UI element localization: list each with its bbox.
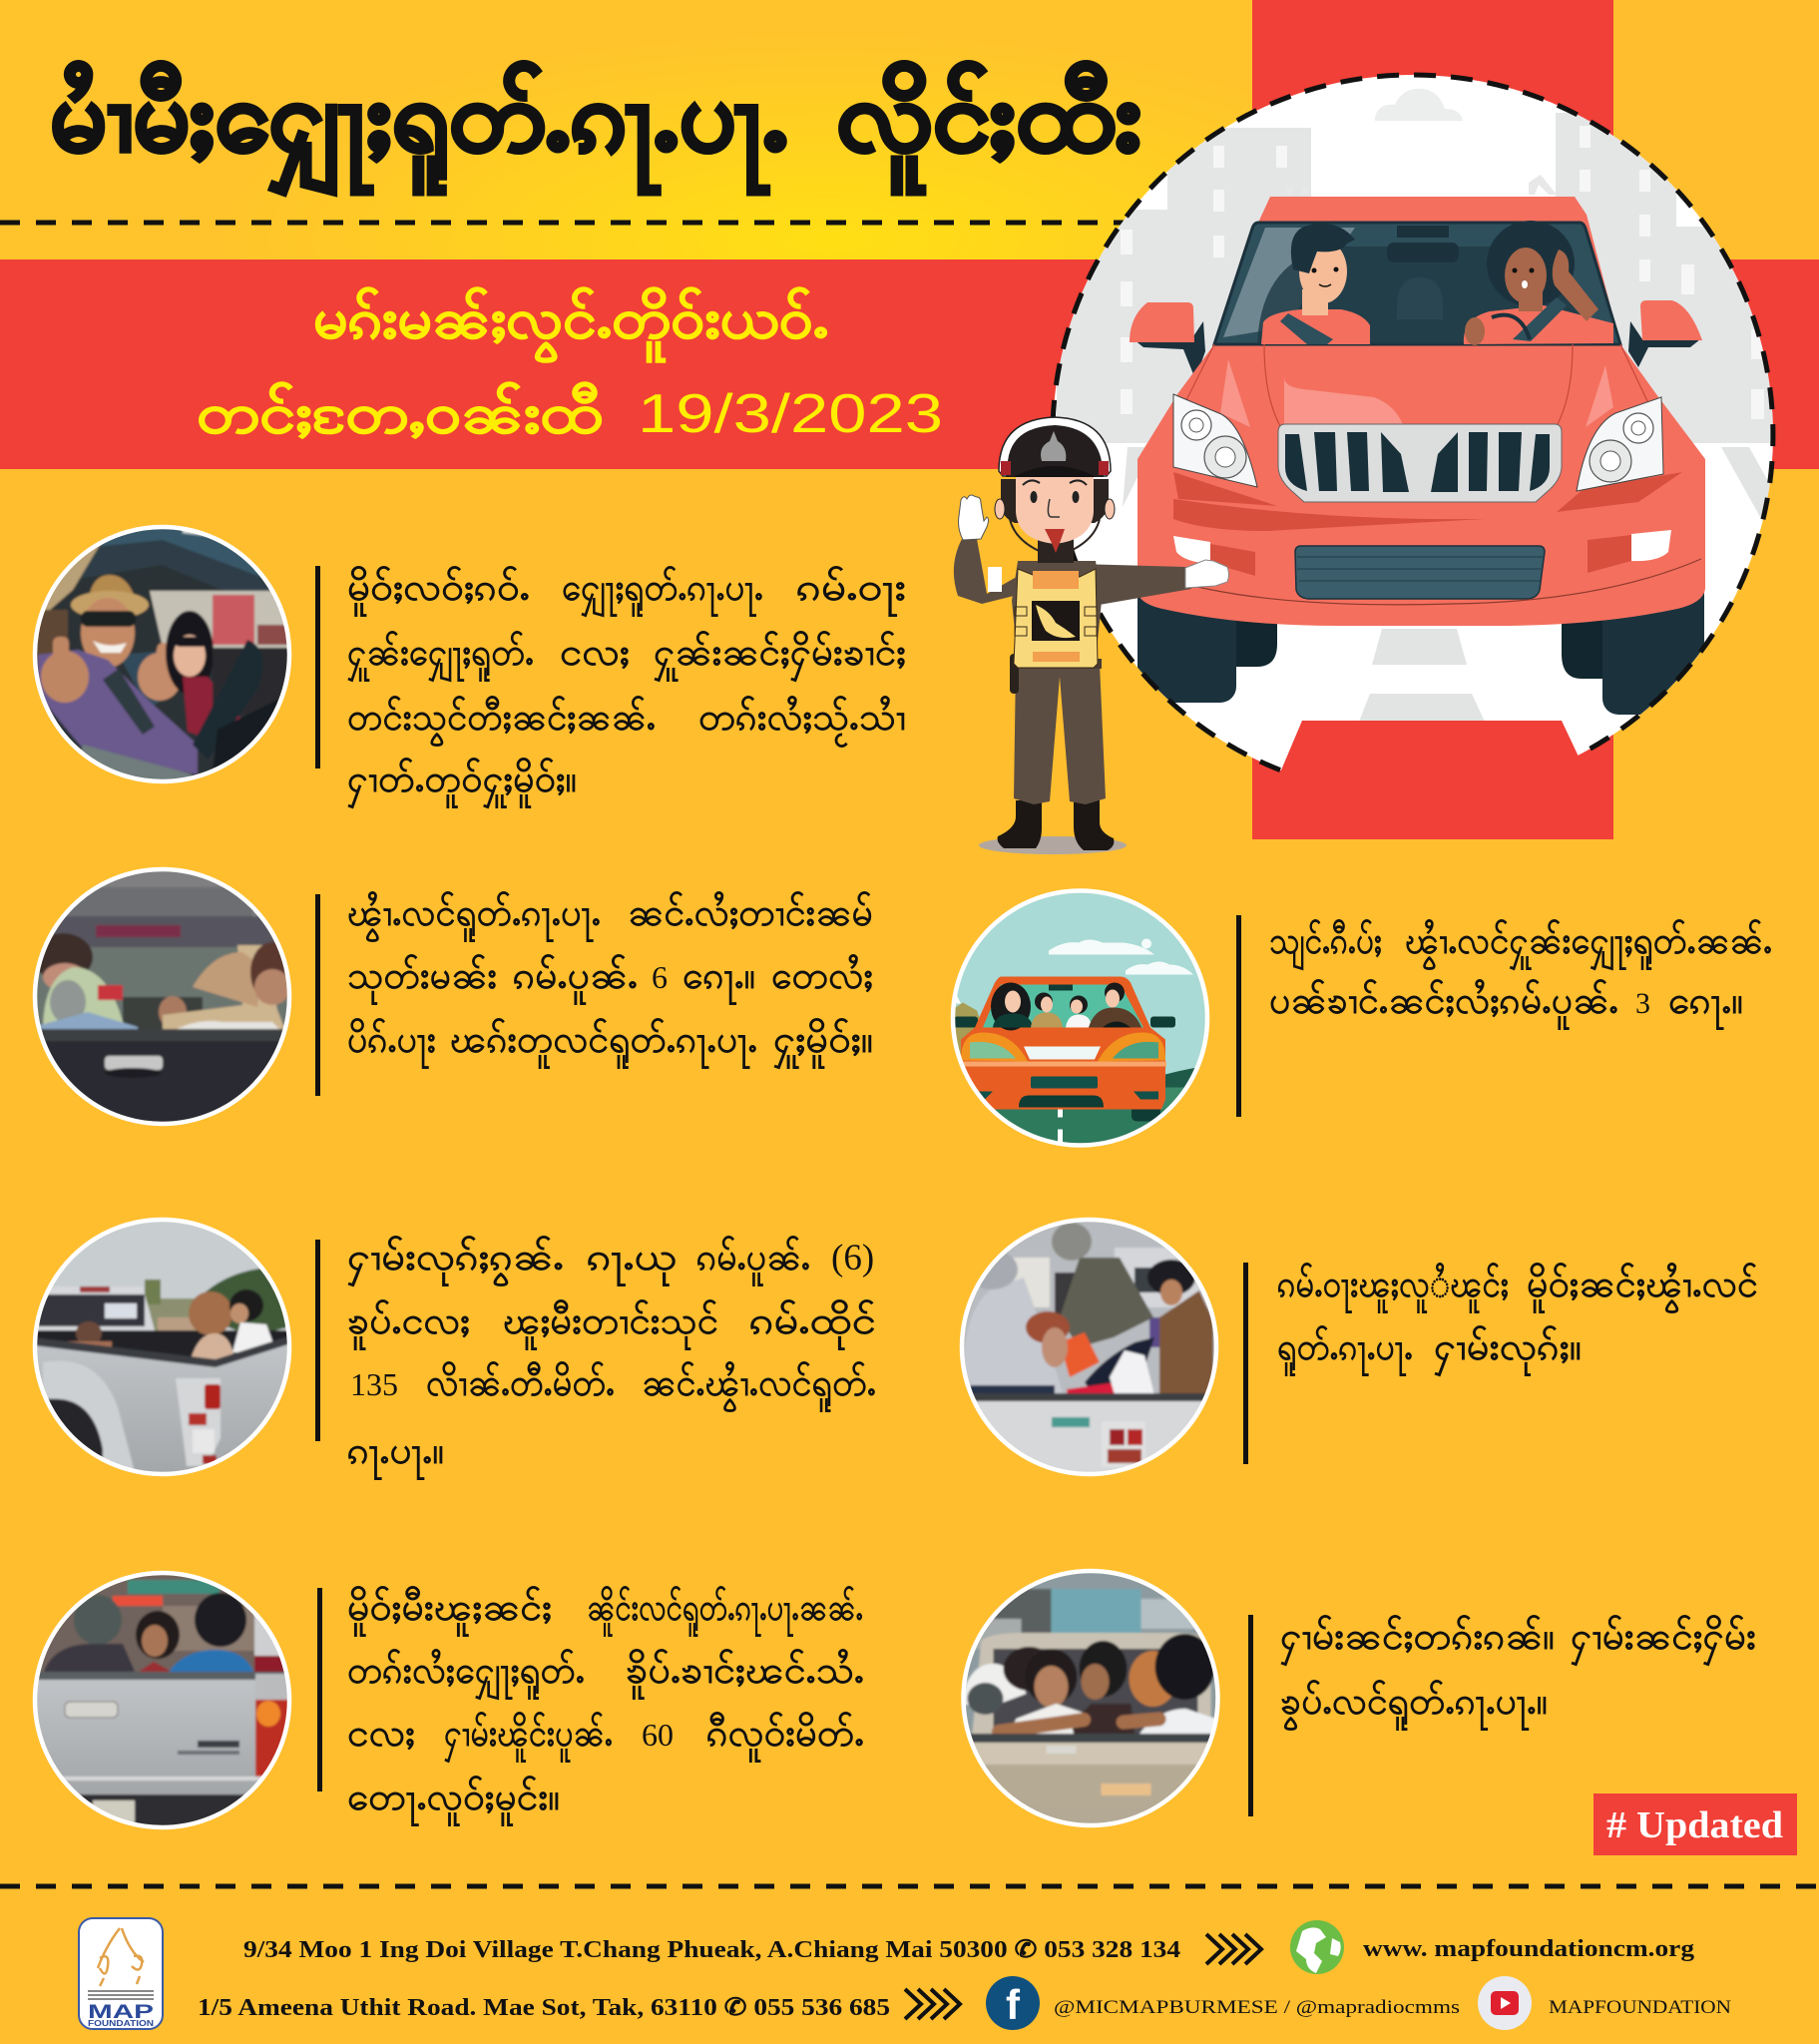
text block 4: ႁၢမ်းၽိူင်းပူၼ်ႉ (444, 1712, 613, 1764)
text block 1: တင်းသွင်တီႈၼင်ႈၼၼ်ႉ (347, 696, 656, 747)
text block right 1: 3 (1635, 987, 1650, 1020)
photo: climbing into pickup (960, 1218, 1218, 1476)
rear seat, mirror (1257, 247, 1591, 344)
logo: MAP Foundation (79, 1918, 163, 2029)
text block 1 (315, 566, 906, 809)
neck and head (1038, 539, 1074, 563)
text block 1: ႁျေႃႈရူတ်ႉၵႃႉပႃႉ (562, 566, 763, 618)
text block right 2: ႁၢမ်းလုၵ်ႈ။ (1434, 1325, 1582, 1377)
roof rails (1529, 175, 1556, 195)
text block 2: သုတ်းမၼ်း (347, 954, 497, 1005)
text block 3: ၵမ်ႉပူၼ်ႉ (696, 1236, 810, 1286)
logo: MAP Foundation: MAP (88, 2002, 154, 2023)
subtitle: တင်ႈတႄႇဝၼ်းထီ (197, 381, 603, 444)
text block 2: ၵမ်ႉပူၼ်ႉ (513, 954, 638, 1005)
subtitle: 19/3/2023 (638, 382, 943, 444)
photo: silver pickup with passengers (33, 1218, 291, 1476)
title: မၢႆမီႈႁျေႃႈရူတ်ႉၵႃႉပႃႉ (50, 61, 788, 196)
youtube handle: MAPFOUNDATION (1549, 1997, 1731, 2018)
illustration: family in orange car (951, 888, 1209, 1148)
text block 3: ၼင်ႉၽွၢႆႉလင်ရူတ်ႉ (642, 1361, 876, 1412)
text block right 2: ၵမ်ႉဝႃးၽူႈလူႆၽူင်ႈ (1277, 1263, 1509, 1313)
text block right 2: ရူတ်ႉၵႃႉပႃႉ (1277, 1325, 1413, 1376)
address line 1: 9/34 Moo 1 Ing Doi Village T.Chang Phueak, A.Chiang Mai 50300 ✆ 053 328 134 (243, 1937, 1180, 1963)
icon: globe (1290, 1920, 1344, 1974)
grille (1278, 424, 1562, 502)
updated badge: # Updated (1606, 1804, 1783, 1846)
text block right 1: ၵေႃႉ။ (1668, 980, 1743, 1030)
text block 2: ပိၵ်ႉပႃး (347, 1018, 436, 1069)
red subtitle band (0, 259, 1819, 469)
text block 1: ႁူၼ်းၼင်ႈႁိမ်းၶၢင်ႈ (654, 631, 906, 683)
mirrors (954, 1016, 978, 1028)
text block 2: ၼင်ႉလႆႈတၢင်းၼမ် (628, 891, 873, 934)
icon: youtube (1478, 1976, 1532, 2030)
text block 1: တၵ်းလႆႈသႂ်ႉသၢႆ (698, 696, 906, 747)
hills (955, 1002, 980, 1055)
photo: silver pickup side close-up (33, 1571, 291, 1829)
text block right 1 (1236, 915, 1772, 1117)
text block 2: ႁူႈမိူဝ်ႈ။ (773, 1018, 873, 1070)
title (50, 61, 1141, 196)
text block 4: ၼိူင်းလင်ရူတ်ႉၵႃႉပႃႉၼၼ်ႉ (587, 1586, 863, 1637)
bumper shading (1173, 472, 1682, 531)
driver woman (1464, 221, 1613, 345)
car (961, 976, 1165, 1110)
windshield (1214, 223, 1620, 344)
text block 2: 6 (652, 959, 668, 995)
road markings (1123, 447, 1799, 722)
social handles: @MICMAPBURMESE / @mapradiocmms (1054, 1997, 1460, 2018)
traffic police officer (954, 417, 1229, 854)
subtitle: မၵ်းမၼ်ႈလွင်ႉတိူဝ်းယဝ်ႉ (313, 286, 828, 362)
dashed ring (1053, 75, 1773, 770)
text block 3: ၶူပ်ႉငလႈ (347, 1299, 470, 1350)
text block 4: ငလႈ (347, 1713, 415, 1755)
text block 4 (317, 1586, 864, 1826)
red vertical band (1252, 0, 1613, 839)
bottom dashed divider (0, 1884, 1819, 1888)
text block 3: လိၢၼ်ႉတီႉမိတ်ႉ (426, 1361, 615, 1404)
text block right 1: ၽွၢႆႉလင်ႁူၼ်းႁျေႃႈရူတ်ႉၼၼ်ႉ (1405, 919, 1772, 971)
wheels (1137, 593, 1704, 715)
text block 4: တၵ်းလႆႈႁျေႃႈရူတ်ႉ (347, 1649, 585, 1701)
address line 2: 1/5 Ameena Uthit Road. Mae Sot, Tak, 63110 ✆ 055 536 685 (198, 1995, 890, 2021)
torso (1012, 561, 1102, 661)
text block 3: ၽူႈမီးတၢင်းသုင် (503, 1299, 718, 1350)
text block 1: ၵမ်ႉဝႃး (796, 566, 906, 617)
photo: couple in car (33, 525, 291, 784)
text block 2: တေလႆႈ (771, 954, 873, 997)
subtitle (197, 286, 943, 444)
helmet (999, 417, 1111, 476)
text block 1: ငလႈ (560, 632, 630, 674)
trousers (1014, 664, 1106, 804)
text block 4: မိူဝ်ႈမီးၽူႈၼင်ႈ (347, 1586, 552, 1637)
photo: group in beige pickup (962, 1569, 1219, 1827)
website: www. mapfoundationcm.org (1363, 1936, 1694, 1962)
text block 3: ၵႃႉယု (587, 1237, 677, 1286)
text block 3: ၵမ်ႉထိုင် (749, 1299, 876, 1350)
building windows (1121, 126, 1764, 419)
text block 2: ၵေႃႉ။ (682, 955, 755, 1005)
city buildings (1057, 89, 1776, 443)
text block 3: ႁၢမ်းလုၵ်ႈၵွၼ်ႉ (347, 1236, 564, 1287)
text block 3: ၵႃႉပႃႉ။ (347, 1430, 444, 1480)
arrows 2 (905, 1989, 960, 2019)
title: လိူင်ႈထီး (836, 61, 1141, 195)
text block 3: 135 (350, 1366, 398, 1402)
red notch at foot of circle (1271, 721, 1581, 796)
text block right 1: သျင်ႉၵီႉပ်ႈ (1269, 919, 1382, 970)
photo: passengers in dark pickup bed (33, 867, 294, 1126)
text block 1: ႁူၼ်းႁျေႃႈရူတ်ႉ (347, 631, 534, 683)
text block 3 (315, 1236, 876, 1480)
side mirrors (1130, 300, 1702, 379)
glove outstretched (1185, 560, 1229, 588)
text block 2: ၽၵ်းတူလင်ရူတ်ႉၵႃႉပႃႉ (450, 1018, 757, 1069)
header glow panel (0, 0, 1252, 259)
text block right 3: ႁၢမ်းၼင်ႈႁိမ်း (1571, 1615, 1756, 1667)
hood details (1186, 343, 1648, 426)
logo: MAP Foundation: FOUNDATION (88, 2019, 154, 2028)
text block 4: ၵီလူဝ်းမိတ်ႉ (706, 1712, 864, 1763)
text block right 3 (1248, 1615, 1756, 1816)
icon: facebook: f (1006, 1981, 1021, 2028)
bumper (1152, 530, 1701, 605)
text block 4: တေႃႉလူဝ်ႈမူင်း။ (347, 1776, 560, 1826)
icon: facebook (986, 1976, 1040, 2030)
text block right 3: ႁၢမ်းၼင်ႈတၵ်းၵၼ်။ (1280, 1615, 1555, 1667)
boots (998, 800, 1042, 848)
text block 4: 60 (642, 1717, 674, 1753)
text block right 1: ပၼ်ၶၢင်ႉၼင်ႈလႆႈၵမ်ႉပူၼ်ႉ (1269, 979, 1618, 1030)
top dashed divider (0, 220, 1128, 226)
outstretched arm (1078, 564, 1191, 608)
driver man (1261, 224, 1370, 344)
text block 1: ႁၢတ်ႉတူဝ်ႁူႈမိူဝ်ႈ။ (347, 758, 577, 809)
vest (1014, 569, 1098, 668)
clouds and sun (1049, 940, 1154, 954)
text block 2 (315, 891, 873, 1096)
glove raised (958, 495, 988, 540)
updated badge (1593, 1793, 1797, 1855)
text block right 2: မိူဝ်ႈၼင်ႈၽွၢႆႉလင် (1527, 1263, 1758, 1313)
text block right 2 (1243, 1263, 1758, 1464)
raised arm (954, 539, 1022, 604)
arrows 1 (1206, 1934, 1261, 1964)
headlights (1173, 394, 1663, 491)
headlights (961, 1032, 1028, 1062)
hero illustration: red SUV in dashed circle (1053, 75, 1799, 796)
text block 1: မိူဝ်ႈလဝ်ႈၵဝ်ႉ (347, 566, 530, 617)
face details (1030, 491, 1038, 503)
car body (1137, 197, 1705, 626)
text block right 3: ၶွပ်ႉလင်ရူတ်ႉၵႃႉပႃႉ။ (1280, 1680, 1548, 1731)
text block 2: ၽွၢႆႉလင်ရူတ်ႉၵႃႉပႃႉ (347, 891, 601, 942)
passengers (991, 982, 1031, 1030)
text block 3: (6) (831, 1238, 874, 1278)
text block 4: ၶိူပ်ႉၶၢင်ႈၽင်ႉသႆႉ (626, 1649, 864, 1700)
